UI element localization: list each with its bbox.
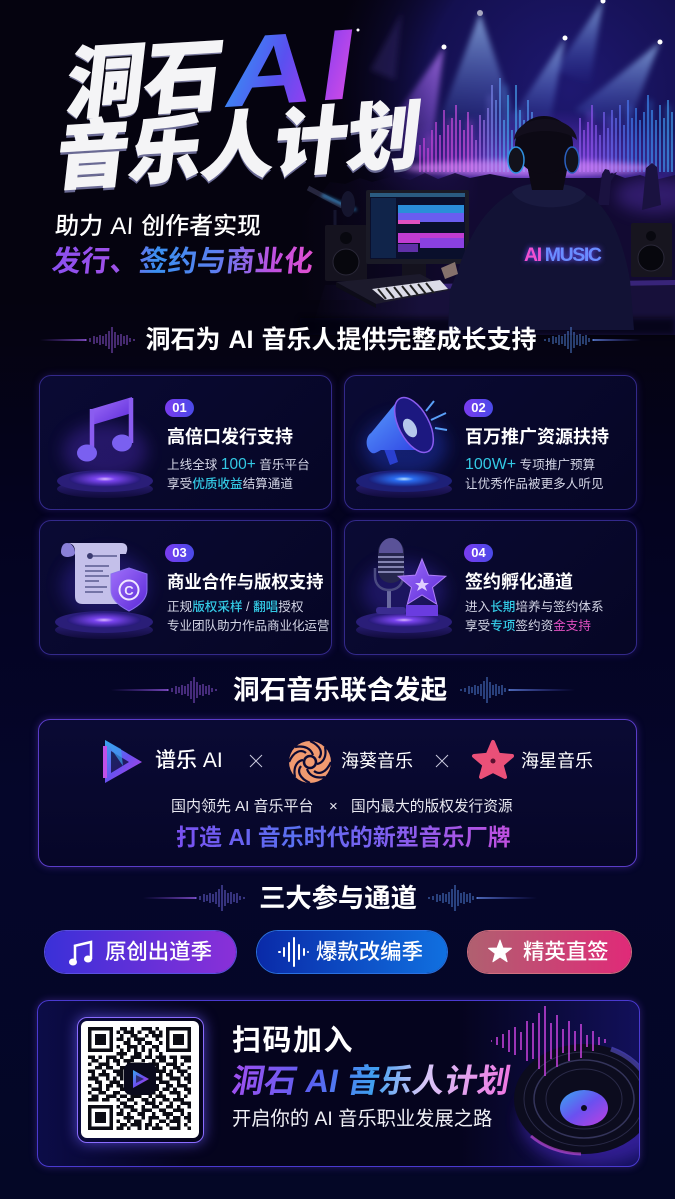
brand name: 谱乐 AI: 谱乐 AI bbox=[155, 749, 223, 772]
partner description bbox=[171, 798, 513, 815]
card description: 进入长期培养与签约体系 bbox=[465, 600, 604, 614]
monitor bbox=[366, 190, 469, 278]
panel: card 02 promotion bbox=[344, 375, 637, 510]
panel: card 01 distribution bbox=[39, 375, 332, 510]
button: hit adaptation: 爆款改编季 bbox=[316, 940, 423, 964]
card heading: 商业合作与版权支持 bbox=[167, 572, 324, 592]
card heading: 高倍口发行支持 bbox=[167, 427, 293, 447]
icon: music note bbox=[69, 940, 92, 966]
button: original debut bbox=[45, 931, 236, 973]
icon: contract and shield on platform bbox=[55, 543, 155, 639]
button: original debut: 原创出道季 bbox=[105, 940, 212, 964]
stage glow background bbox=[300, 0, 675, 240]
number badge: 01 bbox=[172, 400, 187, 415]
card description second line: 享受优质收益结算通道 bbox=[167, 477, 293, 491]
left speaker bbox=[325, 225, 367, 281]
title AI gradient word: AI bbox=[218, 7, 371, 130]
stage haze right bbox=[615, 177, 675, 213]
panel: scan to join bbox=[37, 1000, 640, 1167]
number badge bbox=[464, 399, 493, 417]
icon: microphone and star on platform bbox=[356, 538, 452, 639]
qr code bbox=[77, 1017, 204, 1143]
section heading: three channels: 三大参与通道 bbox=[259, 883, 417, 913]
number badge: 02 bbox=[471, 400, 486, 415]
section heading: growth support: 洞石为 AI 音乐人提供完整成长支持 bbox=[146, 326, 536, 354]
button: elite direct signing: 精英直签 bbox=[523, 940, 609, 964]
button: elite direct signing bbox=[468, 931, 631, 973]
panel: partner brands bbox=[38, 719, 637, 867]
brand name: 海星音乐: 海星音乐 bbox=[521, 751, 593, 771]
equalizer bars bbox=[405, 78, 672, 176]
icon: sound wave bbox=[278, 937, 309, 967]
subtitle: 助力 AI 创作者实现 bbox=[54, 213, 262, 240]
card description: 上线全球 100+ 音乐平台 bbox=[167, 456, 310, 473]
partner description: 国内领先 AI 音乐平台 bbox=[171, 798, 314, 815]
cta description: 开启你的 AI 音乐职业发展之路 bbox=[232, 1109, 492, 1130]
performer on stage bbox=[598, 163, 661, 210]
card heading: 签约孵化通道 bbox=[465, 572, 573, 592]
midi keyboard bbox=[336, 274, 450, 308]
icon: contract and shield on platform: C bbox=[124, 583, 134, 598]
icon: partner logos bbox=[103, 740, 514, 783]
icon: music note on platform bbox=[56, 397, 154, 498]
partner slogan: 打造 AI 音乐时代的新型音乐厂牌 bbox=[176, 824, 511, 850]
crowd silhouette bbox=[300, 173, 675, 300]
panel: card 03 commercial bbox=[39, 520, 332, 655]
number badge bbox=[165, 544, 194, 562]
partner description: × bbox=[329, 798, 338, 815]
card description: 100W+ 专项推广预算 bbox=[465, 456, 595, 473]
card description: 正规版权采样 / 翻唱授权 bbox=[167, 600, 303, 614]
number badge bbox=[464, 544, 493, 562]
card description second line: 让优秀作品被更多人听见 bbox=[465, 477, 604, 491]
microphone on stand bbox=[308, 188, 356, 275]
cta heading: 扫码加入 bbox=[232, 1025, 354, 1057]
title bbox=[52, 7, 425, 199]
icon: megaphone on platform bbox=[356, 396, 454, 498]
brand name: 海葵音乐: 海葵音乐 bbox=[341, 751, 413, 771]
card heading: 百万推广资源扶持 bbox=[465, 427, 609, 447]
stage light beams bbox=[370, 0, 660, 165]
title line one: 洞石 bbox=[62, 31, 228, 129]
cta gradient title: 洞石 AI 音乐人计划 bbox=[229, 1063, 513, 1099]
subtitle gradient line: 发行、签约与商业化 bbox=[50, 246, 315, 278]
card description second line: 享受专项签约资金支持 bbox=[465, 619, 591, 633]
button: hit adaptation bbox=[257, 931, 447, 973]
panel: card 04 signing bbox=[344, 520, 637, 655]
person with AI MUSIC hoodie bbox=[441, 116, 634, 330]
decoration: vinyl record and waveform bbox=[491, 1006, 639, 1166]
number badge bbox=[165, 399, 194, 417]
section heading: joint initiators: 洞石音乐联合发起 bbox=[233, 675, 447, 705]
stage light points bbox=[356, 0, 662, 50]
number badge: 04 bbox=[471, 545, 486, 560]
title line two: 音乐人计划 bbox=[52, 95, 425, 199]
section heading: growth support bbox=[42, 326, 639, 354]
hero concert illustration bbox=[307, 0, 675, 335]
hoodie glow text: AI MUSIC bbox=[524, 244, 602, 266]
icon: star bbox=[488, 940, 512, 962]
right speaker bbox=[631, 223, 672, 277]
partner description: 国内最大的版权发行资源 bbox=[351, 799, 513, 815]
qr center logo bbox=[124, 1063, 156, 1095]
card description second line: 专业团队助力作品商业化运营 bbox=[167, 619, 329, 633]
section heading: joint initiators bbox=[114, 675, 572, 705]
number badge: 03 bbox=[172, 545, 187, 560]
desk bbox=[300, 280, 675, 335]
section heading: three channels bbox=[145, 883, 534, 913]
